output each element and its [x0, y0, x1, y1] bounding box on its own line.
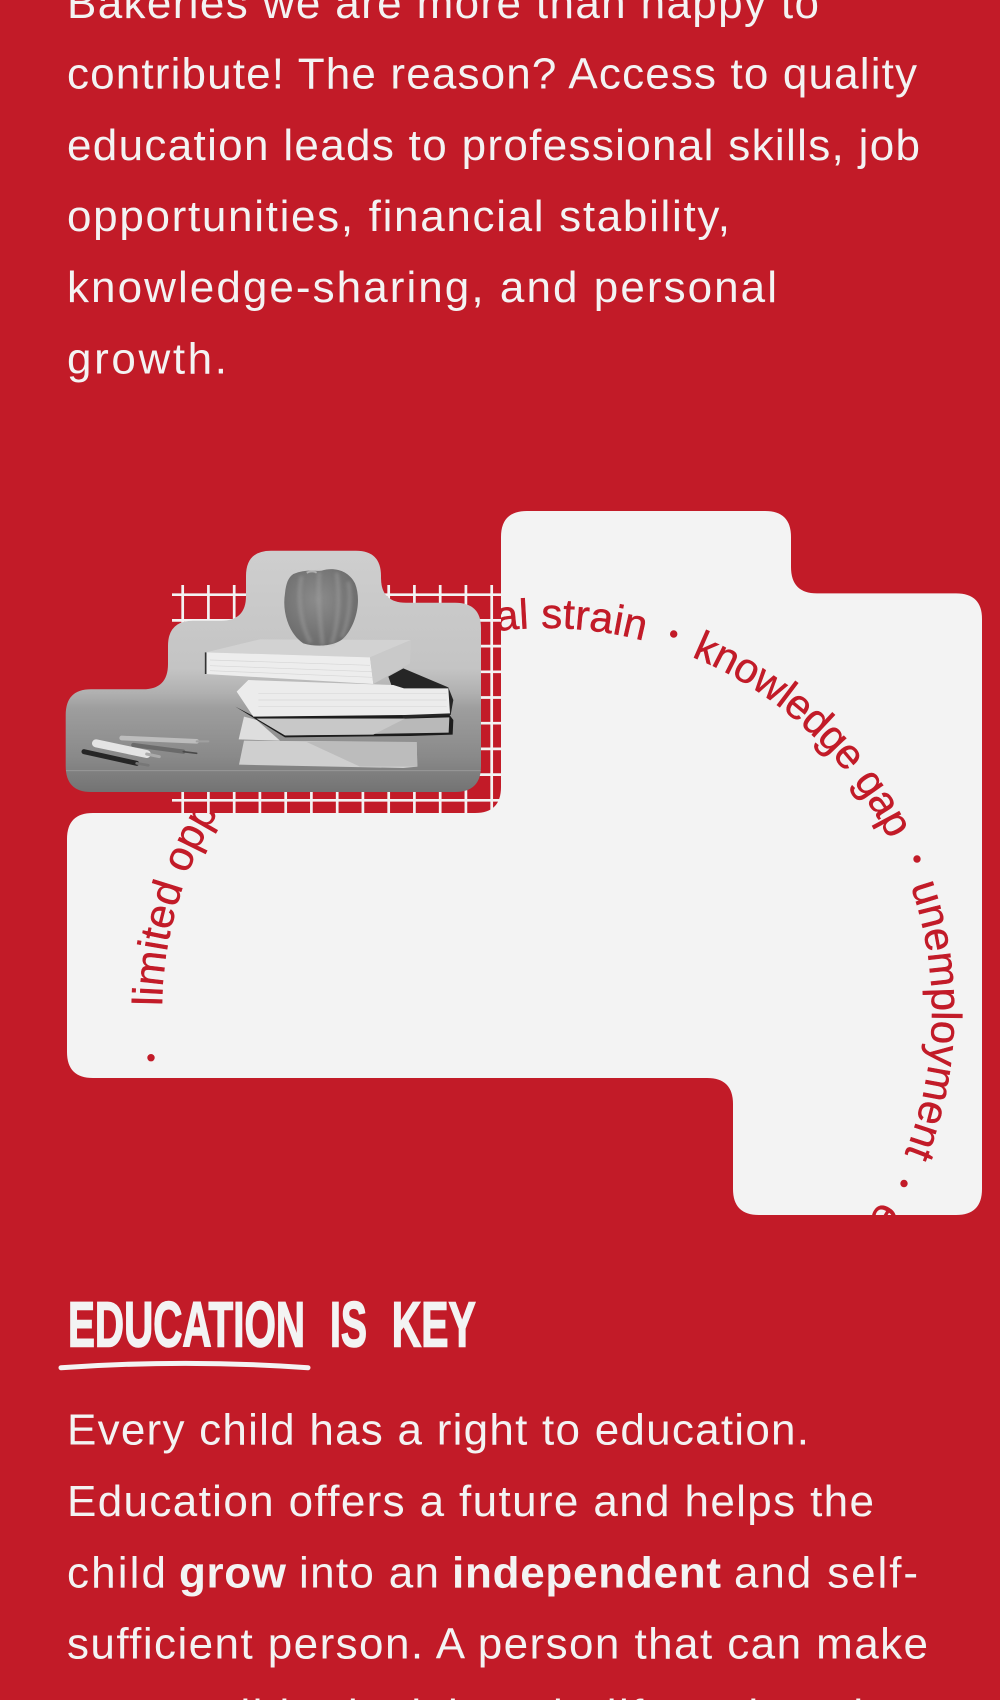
body paragraph: child	[67, 1548, 166, 1598]
intro paragraph: growth.	[67, 334, 227, 384]
intro paragraph: opportunities, financial stability,	[67, 192, 730, 241]
circular text ring: al strain	[501, 598, 646, 640]
book 4, bottom	[239, 717, 417, 768]
body paragraph	[67, 1406, 928, 1700]
book 2	[237, 668, 453, 718]
intro paragraph: knowledge-sharing, and personal	[67, 263, 777, 312]
circular text ring: e	[872, 1205, 896, 1215]
circular text ring: knowledge gap	[694, 630, 906, 836]
white grid pattern	[172, 585, 501, 813]
intro paragraph: education leads to professional skills, job	[67, 121, 920, 170]
apple	[284, 569, 358, 646]
book 3, black cover	[235, 707, 453, 737]
body paragraph: grow	[179, 1548, 287, 1598]
circular text ring: unemployment	[904, 881, 963, 1162]
heading: education is key: EDUCATION	[68, 1289, 305, 1361]
photo background: wall and table	[60, 543, 493, 797]
body paragraph: independent	[452, 1548, 721, 1598]
photo: apple on stacked books with pencils	[60, 543, 493, 797]
body paragraph: into an	[299, 1548, 439, 1598]
body paragraph: Every child has a right to education.	[67, 1406, 809, 1454]
body paragraph: and self-	[734, 1548, 918, 1598]
heading: education is key: KEY	[392, 1289, 476, 1361]
body paragraph: Education offers a future and helps the	[67, 1477, 874, 1526]
circular text ring: limited opp	[131, 813, 218, 1004]
circular text ring	[84, 550, 963, 1215]
heading underline stroke	[61, 1363, 308, 1368]
intro paragraph	[67, 0, 920, 384]
heading: education is key: IS	[330, 1289, 367, 1361]
book 1, top	[206, 639, 411, 684]
body paragraph: sufficient person. A person that can make	[67, 1620, 928, 1668]
pencils	[84, 738, 208, 765]
intro paragraph: contribute! The reason? Access to quality	[67, 50, 917, 98]
panel: stepped light-grey shape	[67, 511, 982, 1215]
